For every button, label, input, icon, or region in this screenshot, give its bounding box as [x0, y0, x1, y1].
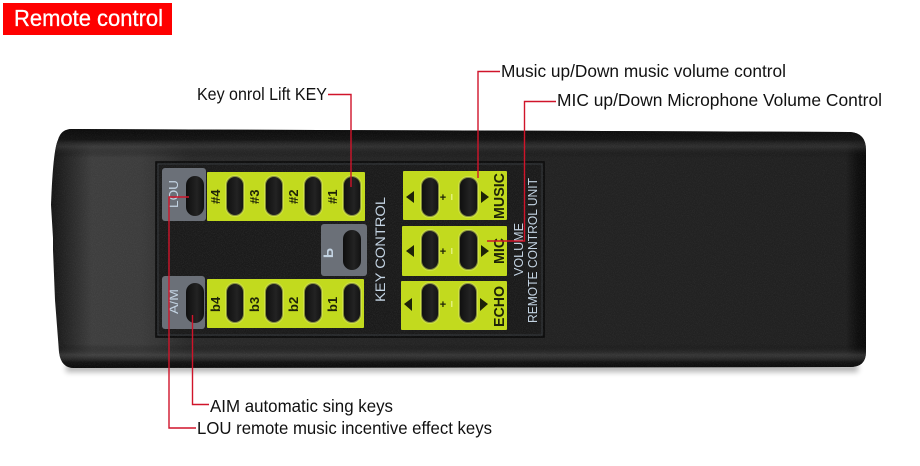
- key group: bottom yellow keys b4 to b1: b3: [247, 297, 262, 312]
- label: key control: KEY CONTROL: [372, 197, 388, 302]
- key group: bottom yellow keys b4 to b1: b1: [325, 297, 340, 312]
- key group: top yellow keys #4 to #1: #1: [325, 190, 340, 204]
- key group: top yellow keys #4 to #1: #3: [247, 190, 262, 204]
- key group: bottom yellow keys b4 to b1: b4: [208, 296, 223, 312]
- callout: music volume: Music up/Down music volume control: [501, 61, 786, 81]
- callout: LOU keys: [169, 197, 492, 438]
- callout: key control lift key: [197, 84, 351, 187]
- label: remote control unit: REMOTE CONTROL UNIT: [525, 178, 540, 323]
- volume block: mic: MIC: [491, 238, 508, 264]
- volume block: music: +: [440, 192, 446, 204]
- label: volume: VOLUME: [511, 223, 526, 276]
- control panel: [156, 162, 544, 337]
- volume block: mic: [402, 226, 508, 276]
- key group: top yellow keys #4 to #1: #2: [286, 190, 301, 204]
- key LOU: [162, 168, 206, 221]
- volume block: mic: +: [440, 246, 446, 258]
- volume block: echo: [401, 281, 508, 330]
- volume block: music: [403, 171, 508, 220]
- key group: top yellow keys #4 to #1: [207, 172, 365, 221]
- title banner: Remote control: [14, 5, 163, 31]
- callout: AIM keys: [192, 315, 393, 416]
- key: natural sign: [320, 224, 367, 276]
- callout: microphone volume: MIC up/Down Microphone Volume Control: [557, 90, 882, 110]
- key: natural sign: Ь: [320, 248, 336, 258]
- volume block: echo: +: [440, 299, 446, 311]
- callout: key control lift key: Key onrol Lift KEY: [197, 84, 327, 104]
- key LOU: LOU: [166, 180, 181, 208]
- callout: music volume: [478, 61, 786, 178]
- callout: microphone volume: [487, 90, 882, 241]
- callout: AIM keys: AIM automatic sing keys: [210, 396, 393, 416]
- remote control body: [51, 129, 866, 372]
- callout: LOU keys: LOU remote music incentive effect keys: [197, 418, 492, 438]
- key group: bottom yellow keys b4 to b1: [207, 279, 364, 328]
- key group: top yellow keys #4 to #1: #4: [208, 189, 223, 204]
- volume block: music: MUSIC: [491, 173, 508, 219]
- key group: bottom yellow keys b4 to b1: b2: [286, 297, 301, 312]
- key A/M: A/M: [166, 289, 181, 314]
- key A/M: [162, 276, 205, 329]
- volume block: echo: ECHO: [491, 286, 508, 327]
